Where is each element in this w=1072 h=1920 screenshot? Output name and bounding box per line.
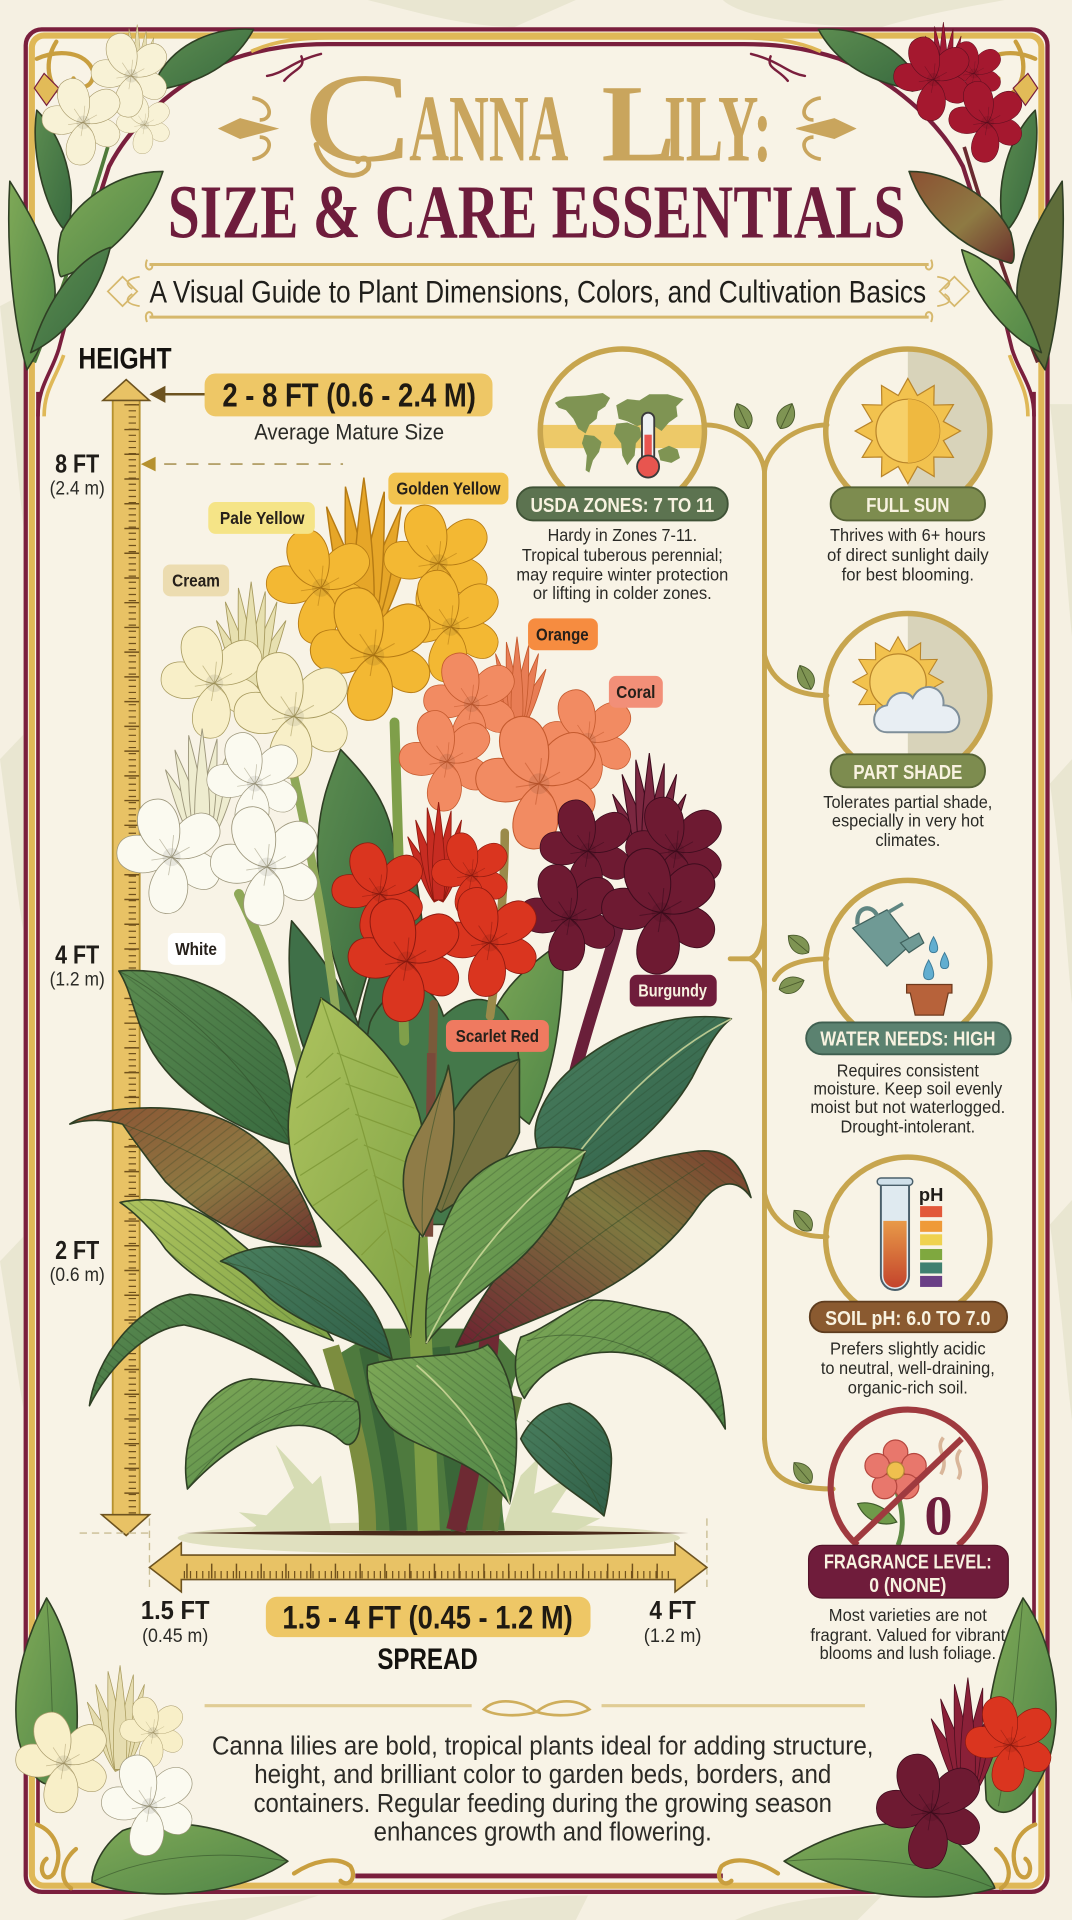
pill: fragrance — [809, 1545, 1008, 1598]
leaf: upper right teal — [535, 1017, 731, 1182]
pill: part shade — [831, 754, 985, 787]
4 ft spread label: 4 FT — [649, 1597, 696, 1625]
text: soil ph: Prefers slightly acidic — [830, 1338, 986, 1358]
care: soil ph — [810, 1157, 1007, 1397]
icon: no fragrance flower: 0 — [924, 1485, 953, 1547]
text: part shade — [823, 792, 992, 850]
leaf: dark centre left — [221, 1247, 392, 1359]
title line 1: ILY: — [664, 75, 772, 181]
flower: orange coral — [398, 637, 637, 851]
vine leaves — [729, 400, 818, 1488]
color label: white: White — [175, 939, 217, 959]
text: water needs: moisture. Keep soil evenly — [813, 1079, 1002, 1099]
text: water needs — [810, 1060, 1005, 1137]
4 ft label — [50, 942, 105, 991]
text: fragrance: fragrant. Valued for vibrant — [810, 1625, 1005, 1645]
care: part shade — [823, 613, 992, 850]
footer paragraph: height, and brilliant color to garden beds, borders, and — [254, 1759, 831, 1789]
text: soil ph: organic-rich soil. — [848, 1377, 968, 1397]
color label: orange: Orange — [536, 624, 589, 644]
leaf: light lower left — [120, 1200, 333, 1341]
title line 1: C — [304, 46, 412, 188]
footer paragraph — [212, 1731, 874, 1846]
flower: cream — [160, 582, 356, 780]
color label: orange — [528, 618, 598, 650]
care: fragrance — [809, 1410, 1008, 1663]
color label: cream — [163, 564, 229, 596]
color label: pale yellow — [208, 502, 315, 534]
8 ft label — [50, 451, 105, 500]
flower: scarlet red — [330, 802, 544, 1023]
icon: world map and thermometer — [540, 348, 706, 496]
leaf: brown right — [456, 1151, 751, 1347]
arrow to ruler — [149, 386, 205, 403]
color label: pale yellow: Pale Yellow — [220, 508, 305, 528]
height label: HEIGHT — [78, 343, 172, 376]
4 ft label: 4 FT — [55, 942, 99, 970]
4 ft spread label — [644, 1597, 701, 1647]
text: full sun: for best blooming. — [842, 564, 974, 584]
care: usda zones — [516, 348, 728, 603]
color label: coral: Coral — [616, 682, 655, 702]
height ruler — [102, 380, 149, 1536]
pill: full sun — [831, 487, 985, 520]
2 ft label — [50, 1237, 105, 1286]
text: usda zones: or lifting in colder zones. — [533, 583, 712, 603]
vine connectors — [706, 425, 833, 1489]
leaf: olive behind — [432, 1059, 519, 1212]
pill: full sun: FULL SUN — [866, 495, 949, 517]
footer divider — [205, 1701, 865, 1715]
2 ft label: 2 FT — [55, 1237, 99, 1265]
color label: burgundy: Burgundy — [638, 981, 707, 1001]
text: usda zones: Tropical tuberous perennial; — [522, 545, 723, 565]
leaf: dark upper left — [119, 970, 293, 1145]
flower: golden yellow — [265, 478, 506, 722]
text: water needs: Requires consistent — [837, 1060, 979, 1080]
central stems — [331, 1053, 576, 1531]
flower stems — [239, 722, 620, 1224]
leaf: lower left mid — [186, 1379, 360, 1489]
title — [168, 46, 905, 255]
pill: soil ph: SOIL pH: 6.0 TO 7.0 — [825, 1308, 991, 1330]
leaf: bud brown — [403, 1065, 454, 1237]
footer paragraph: containers. Regular feeding during the growing season — [254, 1788, 832, 1818]
8 ft label: 8 FT — [55, 451, 99, 479]
height range pill: 2 - 8 FT (0.6 - 2.4 M) — [222, 378, 476, 415]
care: water needs — [806, 880, 1011, 1137]
1.5 ft label — [141, 1597, 210, 1647]
text: part shade: Tolerates partial shade, — [823, 792, 992, 812]
4 ft spread label: (1.2 m) — [644, 1626, 701, 1647]
icon: watering can and pot — [826, 880, 990, 1027]
title flourish left — [219, 98, 277, 159]
title swash — [316, 144, 369, 175]
text: full sun: Thrives with 6+ hours — [830, 525, 986, 545]
pill: usda zones: USDA ZONES: 7 TO 11 — [530, 495, 714, 517]
text: water needs: moist but not waterlogged. — [810, 1097, 1005, 1117]
plant illustration — [70, 478, 751, 1554]
8 ft dashed marker — [141, 457, 343, 471]
text: soil ph — [821, 1338, 995, 1397]
text: part shade: especially in very hot — [832, 811, 984, 831]
color label: scarlet red — [446, 1020, 549, 1052]
spread ruler — [149, 1543, 707, 1592]
title line 1: L — [602, 62, 675, 184]
leaf: centre bottom — [367, 1344, 516, 1504]
pill: usda zones — [517, 487, 728, 520]
leaf: lower left dark — [89, 1294, 322, 1406]
subtitle frame — [108, 260, 969, 322]
spread label: SPREAD — [377, 1643, 478, 1676]
grass — [239, 1445, 600, 1531]
corner botanical: top right — [818, 22, 1063, 370]
icon: test tube and ph scale — [826, 1157, 990, 1304]
pill: fragrance: 0 (NONE) — [869, 1575, 946, 1597]
spread range pill: 1.5 - 4 FT (0.45 - 1.2 M) — [282, 1600, 573, 1636]
flower: white — [115, 727, 325, 927]
central stem bundle — [341, 1329, 521, 1531]
text: usda zones: may require winter protection — [516, 564, 728, 584]
color label: golden yellow: Golden Yellow — [396, 479, 501, 499]
icon: sun — [826, 349, 990, 496]
color label: coral — [609, 676, 663, 708]
pill: fragrance: FRAGRANCE LEVEL: — [824, 1552, 992, 1574]
back leaves — [289, 749, 564, 1224]
icon: test tube and ph scale: pH — [919, 1184, 943, 1205]
text: fragrance: blooms and lush foliage. — [820, 1643, 996, 1663]
pill: soil ph — [810, 1302, 1007, 1332]
text: soil ph: to neutral, well-draining, — [821, 1358, 995, 1378]
2 ft label: (0.6 m) — [50, 1265, 105, 1286]
text: usda zones: Hardy in Zones 7-11. — [548, 525, 697, 545]
pill: part shade: PART SHADE — [853, 762, 962, 784]
pill: water needs: WATER NEEDS: HIGH — [820, 1029, 995, 1051]
leaf: brown left — [70, 1108, 321, 1247]
footer paragraph: Canna lilies are bold, tropical plants ideal for adding structure, — [212, 1731, 874, 1761]
pill: water needs — [806, 1022, 1011, 1054]
title flourish right — [796, 98, 855, 159]
title line 1: ANNA — [409, 75, 568, 181]
8 ft label: (2.4 m) — [50, 479, 105, 500]
color label: scarlet red: Scarlet Red — [456, 1026, 539, 1046]
corner botanical: bottom right — [784, 1598, 1057, 1897]
color label: burgundy — [630, 975, 717, 1007]
text: part shade: climates. — [875, 830, 940, 850]
color label: white — [168, 933, 225, 965]
ground — [178, 1522, 689, 1554]
leaf: centre right green — [426, 1147, 586, 1343]
text: full sun — [827, 525, 989, 584]
corner botanical: top left — [9, 24, 254, 370]
average mature size: Average Mature Size — [254, 420, 444, 445]
leaf: lower right — [515, 1300, 725, 1429]
text: fragrance: Most varieties are not — [829, 1605, 987, 1625]
leaf: large bright centre — [288, 998, 424, 1337]
text: water needs: Drought-intolerant. — [840, 1117, 975, 1137]
color label: cream: Cream — [172, 571, 220, 591]
icon: no fragrance flower — [831, 1410, 985, 1547]
ground dashed guide — [80, 1518, 707, 1589]
care: full sun — [826, 349, 990, 584]
text: usda zones — [516, 525, 728, 603]
footer paragraph: enhances growth and flowering. — [374, 1816, 712, 1846]
subtitle: A Visual Guide to Plant Dimensions, Colors, and Cultivation Basics — [149, 273, 926, 309]
1.5 ft label: (0.45 m) — [142, 1626, 208, 1647]
leaf: lower right dark — [521, 1403, 611, 1516]
color label: golden yellow — [388, 473, 508, 504]
icon: sun and cloud — [826, 613, 990, 760]
corner botanical: bottom left — [14, 1598, 288, 1894]
text: fragrance — [810, 1605, 1005, 1663]
1.5 ft label: 1.5 FT — [141, 1597, 210, 1625]
text: full sun: of direct sunlight daily — [827, 545, 989, 565]
4 ft label: (1.2 m) — [50, 970, 105, 991]
flower: burgundy — [518, 753, 728, 976]
